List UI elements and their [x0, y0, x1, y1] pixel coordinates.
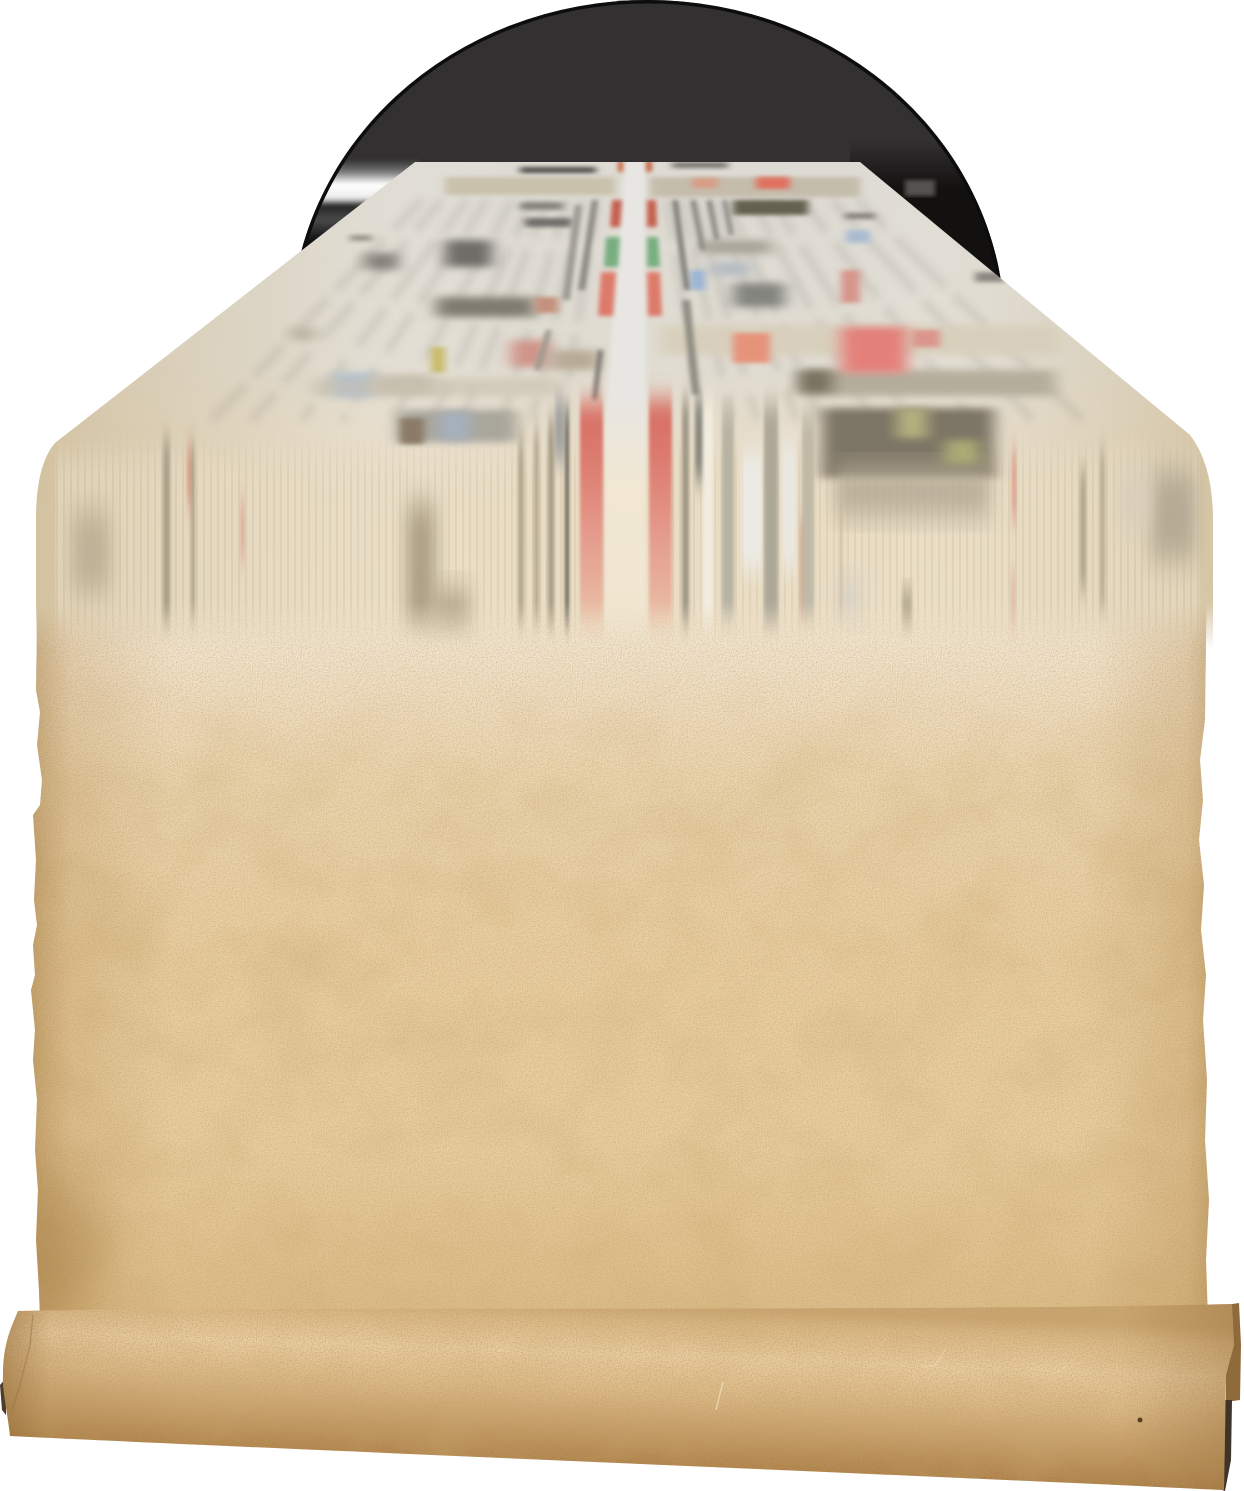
- roller staining texture: [428, 1360, 1139, 1456]
- upper sheet printed columns, top row: [445, 162, 875, 227]
- centre fold white strip: [604, 160, 648, 640]
- press circle outer edge: [302, 0, 1000, 278]
- lower dark photo block, right: [822, 408, 1196, 630]
- upper sheet printed columns, middle row: [350, 230, 1005, 317]
- paper grain texture: [31, 610, 1209, 1310]
- paper edge shading: [31, 608, 1209, 1310]
- rolled paper back edge, upper right: [1226, 1303, 1241, 1402]
- blurred newspaper sheet: [30, 155, 1220, 675]
- lower sheet fine motion stripes: [55, 455, 1200, 645]
- lower dark photo block, left: [72, 410, 517, 640]
- upper coloured stripes: [598, 160, 662, 316]
- machinery on left of press: [302, 160, 420, 250]
- dark press circle: [301, 0, 1001, 278]
- paper staining texture: [98, 716, 1204, 1240]
- rolled paper back edge, lower right: [1222, 1400, 1232, 1491]
- upper sheet perspective column streaks: [212, 200, 1082, 420]
- paper corner stain: [36, 1167, 104, 1310]
- paper roller: [0, 1300, 1244, 1491]
- roller grain texture: [0, 1300, 1244, 1491]
- machinery on right of press: [850, 140, 1000, 278]
- roller end shading: [0, 1300, 1244, 1491]
- scroll paper body: [31, 604, 1209, 1311]
- upper sheet printed columns, lower row: [290, 325, 1060, 397]
- dark column streaks beside the centre fold: [534, 200, 734, 400]
- red stripes on lower sheet: [580, 400, 672, 640]
- lower vertical motion streaks: [163, 400, 1105, 640]
- left dark notch on roller: [0, 1378, 6, 1415]
- crease marks on roller: [12, 1315, 1142, 1422]
